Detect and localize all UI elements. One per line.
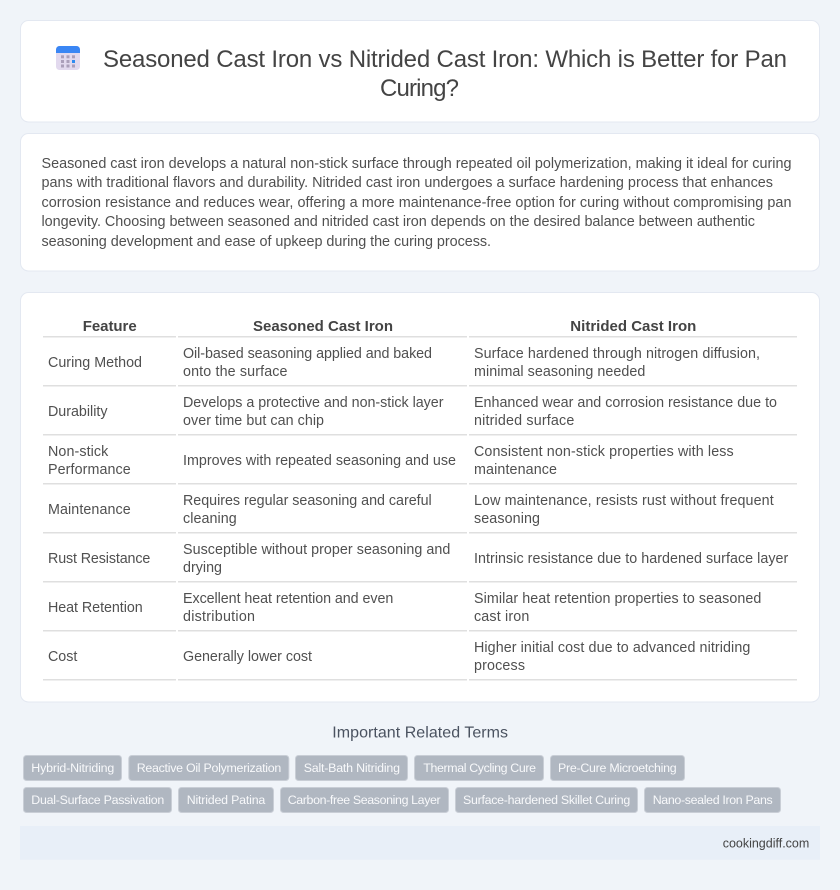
- table header row: Feature: [83, 318, 137, 335]
- table row: non-stick performance: Consistent non-stick properties with less: [474, 444, 734, 460]
- panel: title header: [20, 20, 820, 122]
- table row: heat retention: Heat Retention: [48, 600, 143, 616]
- table row: curing method: Oil-based seasoning applied and baked: [183, 346, 432, 362]
- footer bar: [20, 826, 820, 860]
- table row: curing method: Surface hardened through nitrogen diffusion,: [474, 346, 760, 362]
- table row: curing method: minimal seasoning needed: [474, 364, 645, 380]
- title: Curing?: [380, 75, 459, 102]
- related term tags: Dual-Surface Passivation: [31, 793, 164, 807]
- related term tags: Reactive Oil Polymerization: [137, 761, 281, 775]
- table row: non-stick performance: [48, 444, 734, 478]
- table row: curing method: [48, 346, 760, 380]
- related term tags: Pre-Cure Microetching: [558, 761, 677, 775]
- table row: cost: Generally lower cost: [183, 649, 312, 665]
- table row: cost: [48, 640, 750, 674]
- table row: curing method: onto the surface: [183, 364, 288, 380]
- table row: heat retention: distribution: [183, 609, 255, 625]
- table row: curing method: Curing Method: [48, 355, 142, 371]
- text block: summary: [42, 156, 792, 250]
- table row: maintenance: [48, 493, 774, 527]
- table row: maintenance: Maintenance: [48, 502, 131, 518]
- heading: related terms: Important Related Terms: [332, 724, 508, 742]
- table row: heat retention: [48, 591, 761, 625]
- table row: rust resistance: Intrinsic resistance due to hardened surface layer: [474, 551, 789, 567]
- title: Seasoned Cast Iron vs Nitrided Cast Iron: Which is Better for Pan: [103, 46, 787, 73]
- related term tags: Hybrid-Nitriding: [31, 761, 114, 775]
- table header row: Seasoned Cast Iron: [253, 318, 393, 335]
- title: [103, 46, 787, 102]
- panel: summary paragraph: [20, 134, 820, 271]
- table row: non-stick performance: Improves with repeated seasoning and use: [183, 453, 456, 469]
- text block: summary: longevity. Choosing between seasoned and nitrided cast iron depends on the desired balance between authentic: [42, 214, 755, 230]
- footer bar: cookingdiff.com: [723, 836, 809, 850]
- table row: non-stick performance: Performance: [48, 462, 131, 478]
- related term tags: Surface-hardened Skillet Curing: [463, 793, 630, 807]
- text block: summary: Seasoned cast iron develops a natural non-stick surface through repeated oil polymerization, making it ideal for curing: [42, 156, 792, 172]
- table row: durability: Durability: [48, 404, 108, 420]
- table row: durability: Develops a protective and non-stick layer: [183, 395, 444, 411]
- table row: cost: Higher initial cost due to advanced nitriding: [474, 640, 750, 656]
- text block: summary: seasoning development and ease of upkeep during the curing process.: [42, 234, 491, 250]
- table row: heat retention: cast iron: [474, 609, 529, 625]
- table row: rust resistance: drying: [183, 560, 222, 576]
- related term tags: Salt-Bath Nitriding: [304, 761, 400, 775]
- table row: maintenance: cleaning: [183, 511, 237, 527]
- table row: cost: Cost: [48, 649, 77, 665]
- related term tags: [24, 756, 780, 812]
- related term tags: Nitrided Patina: [187, 793, 265, 807]
- table row: maintenance: seasoning: [474, 511, 540, 527]
- table row: non-stick performance: Non-stick: [48, 444, 109, 460]
- table row: cost: process: [474, 658, 525, 674]
- related term tags: Thermal Cycling Cure: [423, 761, 536, 775]
- table row: non-stick performance: maintenance: [474, 462, 557, 478]
- table row: durability: [48, 395, 777, 429]
- text block: summary: corrosion resistance and reduces wear, offering a more maintenance-free option for curing without compromising pan: [42, 195, 792, 211]
- table row: maintenance: Low maintenance, resists rust without frequent: [474, 493, 774, 509]
- related term tags: Nano-sealed Iron Pans: [653, 793, 773, 807]
- table row: heat retention: Excellent heat retention and even: [183, 591, 393, 607]
- table row: durability: over time but can chip: [183, 413, 324, 429]
- table header row: Nitrided Cast Iron: [570, 318, 696, 335]
- table row: durability: Enhanced wear and corrosion resistance due to: [474, 395, 777, 411]
- icon: calendar: [56, 46, 80, 70]
- table row: rust resistance: [48, 542, 789, 576]
- table row: heat retention: Similar heat retention properties to seasoned: [474, 591, 761, 607]
- text block: summary: pans with traditional flavors and durability. Nitrided cast iron undergoes a surface hardening process that enhances: [42, 175, 773, 191]
- table row: durability: nitrided surface: [474, 413, 574, 429]
- panel: comparison table: [20, 292, 820, 702]
- table row: rust resistance: Susceptible without proper seasoning and: [183, 542, 450, 558]
- table row: maintenance: Requires regular seasoning and careful: [183, 493, 432, 509]
- table row: rust resistance: Rust Resistance: [48, 551, 150, 567]
- table header row: [83, 318, 696, 335]
- related term tags: Carbon-free Seasoning Layer: [288, 793, 441, 807]
